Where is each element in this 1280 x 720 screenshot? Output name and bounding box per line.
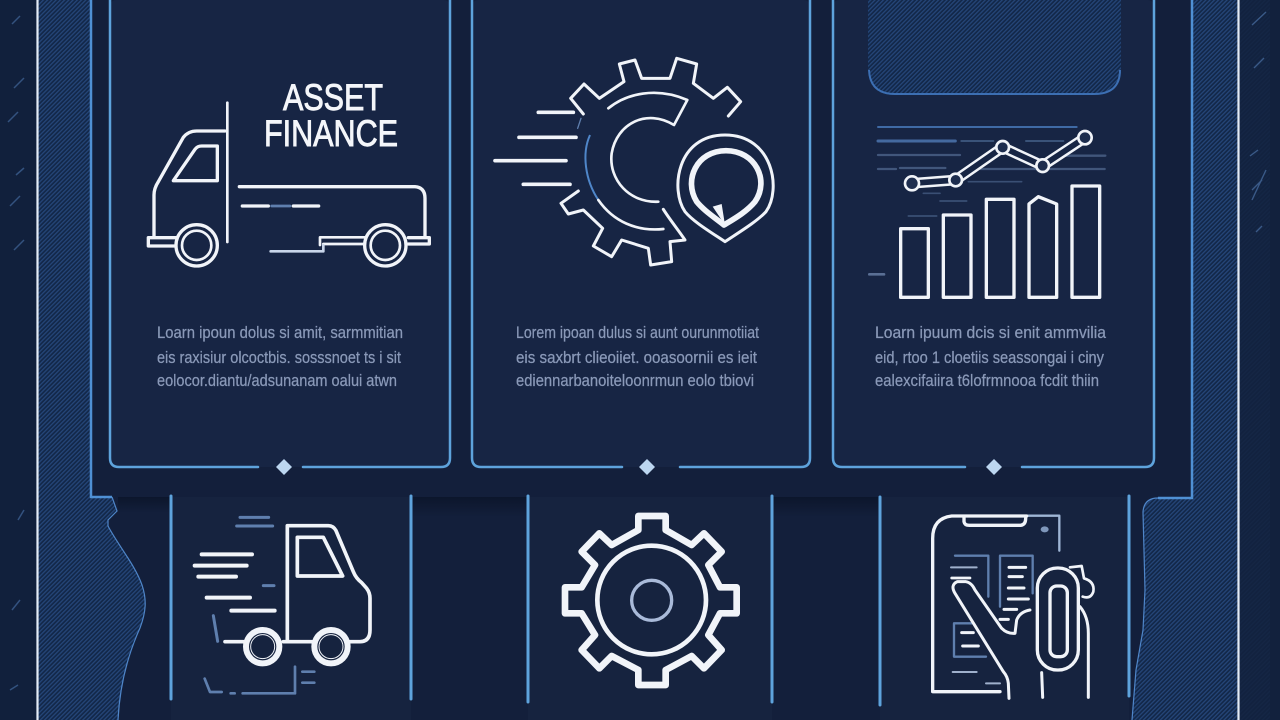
heading <box>264 77 398 154</box>
text block: eis saxbrt clieoiiet. ooasoornii es ieit <box>516 348 757 367</box>
icon: gear with location pin <box>495 58 773 265</box>
blob edge strokes <box>108 497 1158 720</box>
bottom column: phone and hand <box>880 496 1129 720</box>
text block <box>157 323 403 390</box>
text block: ediennarbanoiteloonrmun eolo tbiovi <box>516 371 754 390</box>
icon: moving truck <box>195 517 370 693</box>
right textured edge <box>1239 0 1280 720</box>
panel: growth chart <box>833 0 1154 475</box>
text block <box>875 323 1106 390</box>
bottom column: truck <box>171 496 411 720</box>
heading: ASSET <box>283 77 383 118</box>
icon: large gear <box>565 516 737 685</box>
icon: phone in hand <box>933 516 1094 698</box>
gutter top shadows <box>118 497 880 517</box>
text block: Lorem ipoan dulus si aunt ourunmotiiat <box>516 323 759 342</box>
left hatched band and blob <box>37 0 145 720</box>
text block: eolocor.diantu/adsunanam oalui atwn <box>157 371 397 390</box>
text block: eis raxisiur olcoctbis. sosssnoet ts i sit <box>157 348 401 367</box>
heading: FINANCE <box>264 113 398 154</box>
diamond marker <box>986 459 1002 475</box>
diamond marker <box>276 459 292 475</box>
bottom column: gear <box>528 496 772 720</box>
panel: asset finance <box>110 0 450 475</box>
left textured edge <box>0 0 37 720</box>
text block: Loarn ipuum dcis si enit ammvilia <box>875 323 1106 342</box>
outer blue frame <box>91 0 1192 498</box>
diamond marker <box>639 459 655 475</box>
text block: Loarn ipoun dolus si amit, sarmmitian <box>157 323 403 342</box>
text block: eid, rtoo 1 cloetiis seassongai i ciny <box>875 348 1104 367</box>
text block <box>516 323 759 390</box>
icon: line and bar chart <box>869 127 1105 297</box>
panel: gear and location <box>472 0 810 475</box>
icon: flatbed truck <box>148 103 429 266</box>
text block: ealexcifaiira t6lofrmnooa fcdit thiin <box>875 371 1099 390</box>
right hatched band and blob <box>1132 0 1238 720</box>
hatched badge <box>868 0 1121 95</box>
